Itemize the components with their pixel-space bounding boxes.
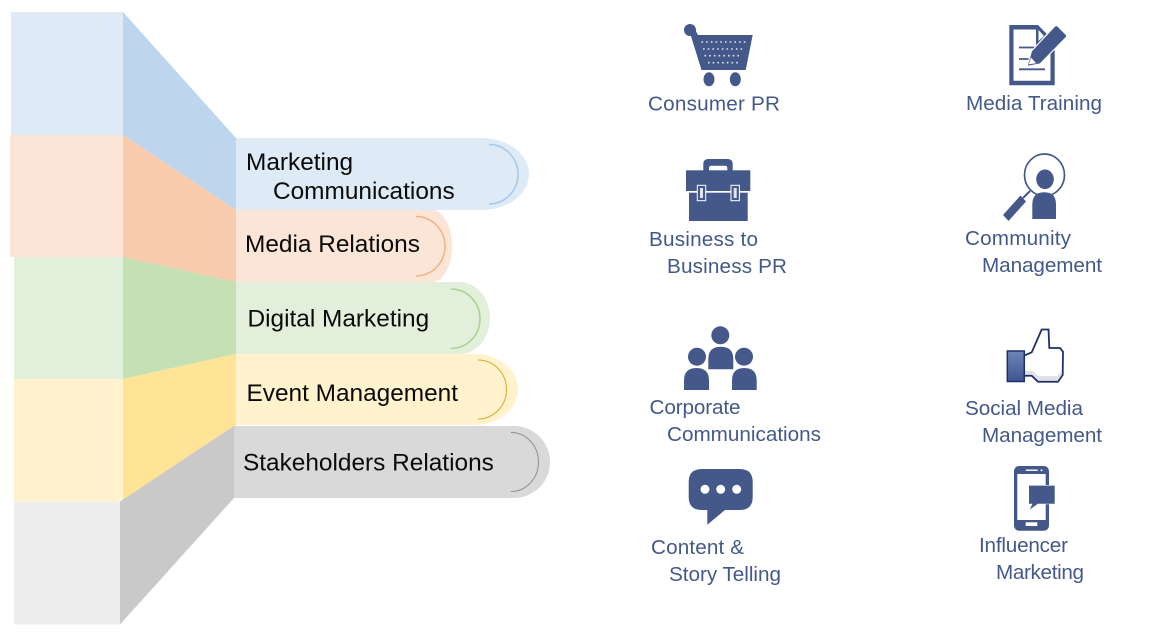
label: social media management: Social Media [965, 397, 1083, 420]
item: community management [965, 154, 1102, 277]
label: corporate communications: Communications [667, 423, 821, 446]
label: community management: Management [982, 254, 1102, 277]
segment: marketing communications: Marketing [246, 149, 353, 176]
segment: event management: Event Management [246, 380, 458, 407]
label: corporate communications: Corporate [650, 396, 740, 419]
label: content and story telling [651, 536, 781, 586]
icon: chat bubble [689, 469, 753, 525]
item: consumer pr [648, 24, 780, 116]
label: influencer marketing: Marketing [996, 561, 1084, 584]
segment: stakeholders relations: Stakeholders Relations [243, 450, 494, 476]
label: business to business pr: Business to [649, 228, 758, 251]
label: social media management: Management [982, 424, 1102, 447]
panel: funnel diagram [10, 12, 550, 624]
label: business to business pr [649, 228, 787, 278]
label: media training: Media Training [966, 92, 1102, 115]
label: business to business pr: Business PR [667, 255, 787, 278]
item: business to business pr [649, 159, 787, 278]
segment: marketing communications: Communications [273, 178, 455, 205]
label: influencer marketing: Influencer [979, 534, 1068, 557]
label: community management: Community [965, 227, 1072, 250]
label: content and story telling: Content & [651, 536, 744, 559]
label: influencer marketing [979, 534, 1084, 584]
icon: smartphone with message [1014, 466, 1055, 531]
icon: document and pencil [1009, 25, 1067, 85]
label: community management [965, 227, 1102, 277]
segment: media relations [10, 135, 452, 282]
label: corporate communications [650, 396, 821, 446]
item: corporate communications [650, 326, 821, 446]
icon: thumbs up [1007, 330, 1063, 382]
item: social media management [965, 330, 1102, 447]
icon: magnifier with person [1003, 154, 1064, 221]
icon: briefcase [686, 159, 750, 221]
icon: three people group [684, 326, 757, 390]
icon: shopping cart [684, 24, 753, 86]
segment: digital marketing [14, 257, 490, 379]
item: influencer marketing [979, 466, 1084, 584]
segment: event management [14, 354, 518, 502]
label: content and story telling: Story Telling [669, 563, 781, 586]
item: content and story telling [651, 469, 781, 586]
segment: digital marketing: Digital Marketing [248, 306, 429, 332]
label: social media management [965, 397, 1102, 447]
segment: marketing communications [11, 12, 529, 210]
segment: stakeholders relations [14, 426, 550, 624]
item: media training [966, 25, 1102, 115]
segment: media relations: Media Relations [245, 231, 420, 258]
label: consumer pr: Consumer PR [648, 92, 780, 116]
